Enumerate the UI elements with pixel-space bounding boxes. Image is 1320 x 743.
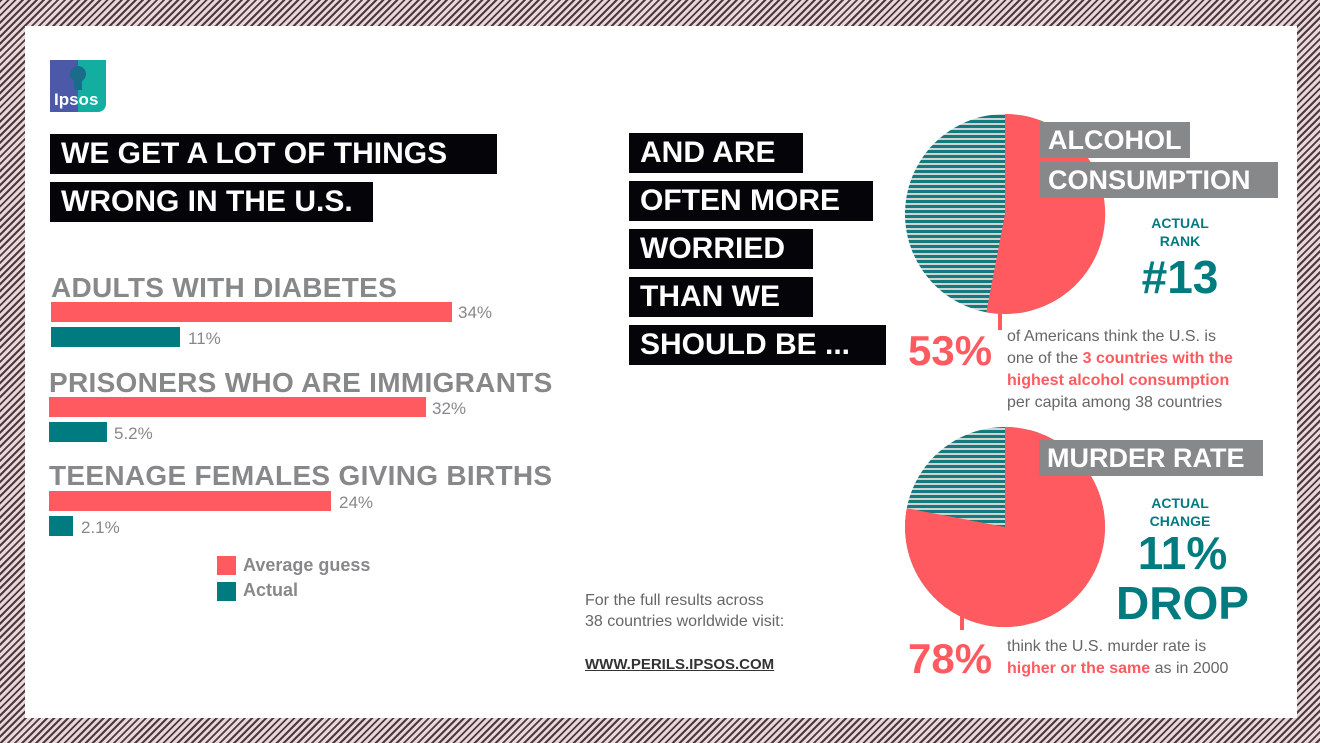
bar chart: ADULTS WITH DIABETES (51, 272, 397, 303)
title left: WRONG IN THE U.S. (61, 185, 353, 218)
stat 78%: think the U.S. murder rate is (1007, 638, 1206, 655)
legend: Average guess (243, 555, 370, 575)
stat 78%: higher or the same as in 2000 (1007, 660, 1228, 677)
heading: murder rate: MURDER RATE (1047, 443, 1244, 473)
pie: murder (905, 427, 1105, 630)
bar chart: 2.1% (81, 518, 120, 537)
stat 53%: of Americans think the U.S. is (1007, 328, 1216, 345)
title right: AND ARE (640, 136, 776, 169)
title left: WE GET A LOT OF THINGS (61, 137, 447, 170)
legend (217, 555, 370, 601)
bar chart (49, 272, 553, 537)
footer link (585, 592, 784, 673)
footer link: For the full results across (585, 592, 764, 609)
bar chart: 32% (432, 399, 466, 418)
bar chart: 5.2% (114, 424, 153, 443)
bar chart: 34% (458, 303, 492, 322)
actual change (1150, 495, 1210, 529)
heading: alcohol consumption (1040, 122, 1278, 198)
stat 53%: per capita among 38 countries (1007, 394, 1222, 411)
heading: alcohol consumption: CONSUMPTION (1048, 165, 1250, 195)
stat 78% (908, 635, 1228, 682)
actual change: CHANGE (1150, 513, 1210, 529)
stat 53%: one of the 3 countries with the (1007, 350, 1233, 367)
bar chart: PRISONERS WHO ARE IMMIGRANTS (49, 367, 553, 398)
actual rank: RANK (1160, 233, 1200, 249)
logo: Ipsos: Ipsos (54, 90, 98, 109)
actual change: ACTUAL (1151, 495, 1209, 511)
heading: alcohol consumption: ALCOHOL (1048, 125, 1181, 155)
text: DROP (1116, 577, 1249, 629)
stat 78%: 78% (908, 635, 992, 682)
title right (629, 133, 886, 365)
footer link: 38 countries worldwide visit: (585, 613, 784, 630)
title right: OFTEN MORE (640, 184, 840, 217)
stat 53%: highest alcohol consumption (1007, 372, 1229, 389)
title left (50, 134, 497, 222)
footer link: WWW.PERILS.IPSOS.COM (585, 656, 774, 673)
bar chart: 11% (188, 329, 221, 348)
text: 11% (1138, 527, 1227, 579)
title right: THAN WE (640, 280, 780, 313)
bar chart: 24% (339, 493, 373, 512)
text: #13 (1142, 251, 1218, 303)
pie: alcohol (905, 114, 1105, 330)
stat 53% (908, 327, 1233, 411)
logo: Ipsos (50, 60, 106, 112)
actual rank (1151, 215, 1209, 249)
legend: Actual (243, 580, 298, 600)
title right: SHOULD BE ... (640, 328, 850, 361)
stat 53%: 53% (908, 327, 992, 374)
bar chart: TEENAGE FEMALES GIVING BIRTHS (49, 460, 552, 491)
title right: WORRIED (640, 232, 785, 265)
actual rank: ACTUAL (1151, 215, 1209, 231)
